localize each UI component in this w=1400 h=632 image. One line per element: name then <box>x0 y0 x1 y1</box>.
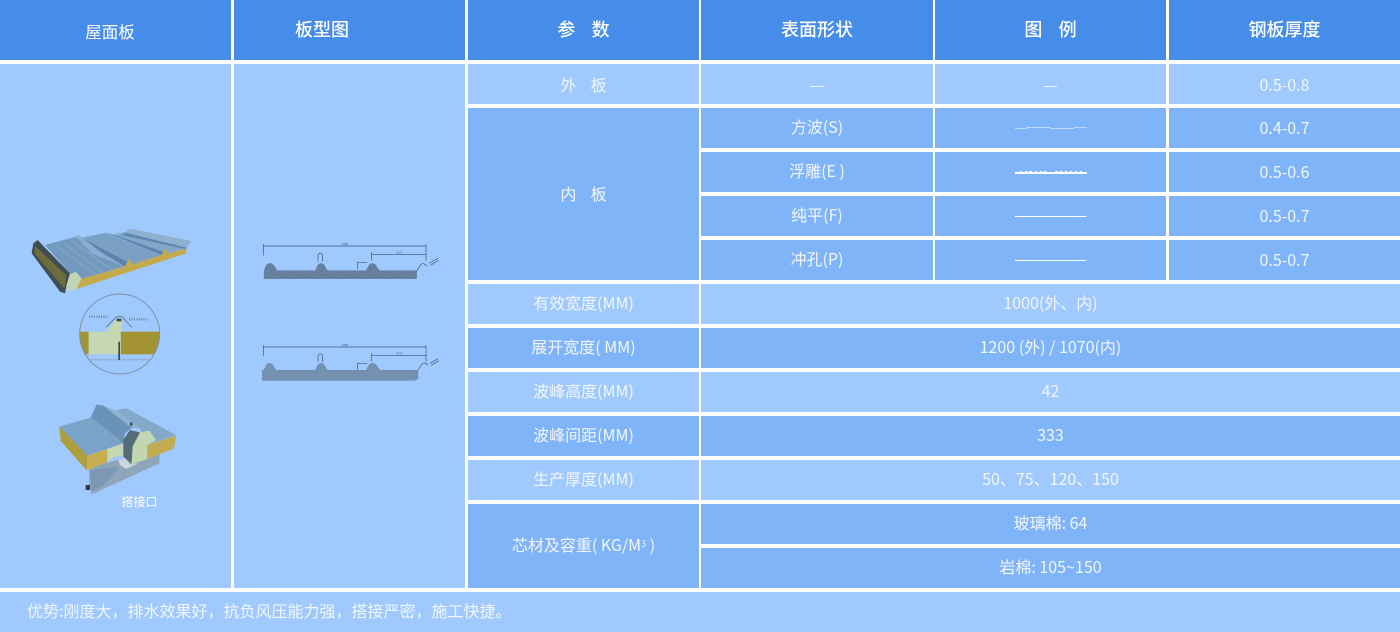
header: 屋面板: 屋面板 <box>85 19 135 43</box>
row: 外板 thickness: 0.5-0.8 <box>1260 72 1309 96</box>
icon: flat line <box>1015 216 1086 217</box>
row: 生产厚度 value <box>701 460 1400 500</box>
row: 浮雕 legend <box>935 152 1166 192</box>
row: 有效宽度 label <box>468 284 699 324</box>
row: 外板 legend: — <box>1043 72 1058 96</box>
row: 有效宽度 label: 有效宽度(MM) <box>533 290 634 314</box>
row: 浮雕 surface shape: 浮雕(E ) <box>789 158 845 182</box>
row: 冲孔 surface shape <box>701 240 933 280</box>
row: 展开宽度 value <box>701 328 1400 368</box>
drawing: top profile: 333 <box>397 251 402 255</box>
row: 浮雕 thickness <box>1169 152 1400 192</box>
header: 参数 <box>468 0 699 60</box>
footer note: advantages: 优势:刚度大，排水效果好，抗负风压能力强，搭接严密，施工快捷。 <box>27 598 511 622</box>
icon: perforated line <box>1015 260 1086 261</box>
row: 展开宽度 value: 1200 (外) / 1070(内) <box>980 334 1121 358</box>
row: 波峰高度 label: 波峰高度(MM) <box>533 378 634 402</box>
panel: roof panel photos <box>0 64 231 588</box>
icon: embossed line <box>1015 171 1087 174</box>
drawing: bottom profile: 333 <box>397 352 402 356</box>
row: 纯平 surface shape: 纯平(F) <box>791 202 843 226</box>
header: 表面形状 <box>701 0 933 60</box>
row: 有效宽度 value: 1000(外、内) <box>1003 290 1098 314</box>
header: 参数: 参 数 <box>557 16 610 42</box>
row: 波峰间距 value <box>701 416 1400 456</box>
row: 生产厚度 label <box>468 460 699 500</box>
header: 板型图 <box>234 0 465 60</box>
row group: 芯材及容重 label <box>468 504 699 588</box>
header: 图例: 图 例 <box>1024 16 1077 42</box>
row: 有效宽度 value <box>701 284 1400 324</box>
row: 方波 thickness <box>1169 108 1400 148</box>
icon: 3D roof sandwich panel <box>32 229 192 293</box>
drawing: bottom profile <box>262 343 439 380</box>
row: 方波 legend <box>935 108 1166 148</box>
row: 波峰间距 value: 333 <box>1037 422 1064 446</box>
row group: 内板 label: 内 板 <box>560 181 607 205</box>
drawing: top profile: 1000 <box>342 242 349 246</box>
row: 波峰间距 label: 波峰间距(MM) <box>533 422 634 446</box>
header: 板型图: 板型图 <box>295 16 349 42</box>
header: 屋面板 <box>0 0 231 60</box>
row: 浮雕 surface shape <box>701 152 933 192</box>
row: 展开宽度 label <box>468 328 699 368</box>
row: 方波 surface shape: 方波(S) <box>791 114 843 138</box>
row: 外板 surface shape: — <box>810 72 824 96</box>
header: 钢板厚度 <box>1169 0 1400 60</box>
panel: panel profile drawings <box>234 64 465 588</box>
row: 外板 label <box>468 64 699 104</box>
row: 波峰高度 label <box>468 372 699 412</box>
row: 纯平 thickness <box>1169 196 1400 236</box>
header: 表面形状: 表面形状 <box>781 16 853 42</box>
drawing: top profile <box>263 242 439 279</box>
footer note: advantages <box>0 592 1400 632</box>
row: 纯平 legend <box>935 196 1166 236</box>
row: 玻璃棉 value: 玻璃棉: 64 <box>1014 510 1087 534</box>
row: 外板 thickness <box>1169 64 1400 104</box>
row: 方波 thickness: 0.4-0.7 <box>1260 115 1309 139</box>
row: 生产厚度 value: 50、75、120、150 <box>982 466 1119 490</box>
row: 冲孔 surface shape: 冲孔(P) <box>791 246 843 270</box>
row: 冲孔 thickness <box>1169 240 1400 280</box>
row: 冲孔 legend <box>935 240 1166 280</box>
row group: 芯材及容重 label: 3 <box>641 536 646 550</box>
row group: 芯材及容重 label: 芯材及容重( KG/M ) <box>512 532 655 556</box>
icon: 3D lap joint <box>59 404 176 494</box>
icon: square wave line <box>1015 127 1087 129</box>
row: 展开宽度 label: 展开宽度( MM) <box>531 334 636 358</box>
row: 外板 legend <box>935 64 1166 104</box>
row: 方波 surface shape <box>701 108 933 148</box>
row: 波峰高度 value: 42 <box>1042 378 1059 402</box>
header: 图例 <box>935 0 1166 60</box>
row: 纯平 surface shape <box>701 196 933 236</box>
row: 岩棉 value <box>701 548 1400 588</box>
row: 岩棉 value: 岩棉: 105~150 <box>999 554 1102 578</box>
row: 冲孔 thickness: 0.5-0.7 <box>1260 247 1309 271</box>
header: 钢板厚度: 钢板厚度 <box>1248 16 1320 42</box>
row: 纯平 thickness: 0.5-0.7 <box>1260 203 1309 227</box>
row: 外板 surface shape <box>701 64 933 104</box>
row: 波峰间距 label <box>468 416 699 456</box>
drawing: bottom profile: 1000 <box>342 343 349 347</box>
row: 外板 label: 外 板 <box>560 72 607 96</box>
row: 波峰高度 value <box>701 372 1400 412</box>
row: 玻璃棉 value <box>701 504 1400 544</box>
label: 搭接口: 搭接口 <box>121 493 158 510</box>
row: 生产厚度 label: 生产厚度(MM) <box>533 466 634 490</box>
row: 浮雕 thickness: 0.5-0.6 <box>1260 159 1309 183</box>
icon: joint cross-section circle <box>80 294 161 374</box>
row group: 内板 label <box>468 108 699 280</box>
